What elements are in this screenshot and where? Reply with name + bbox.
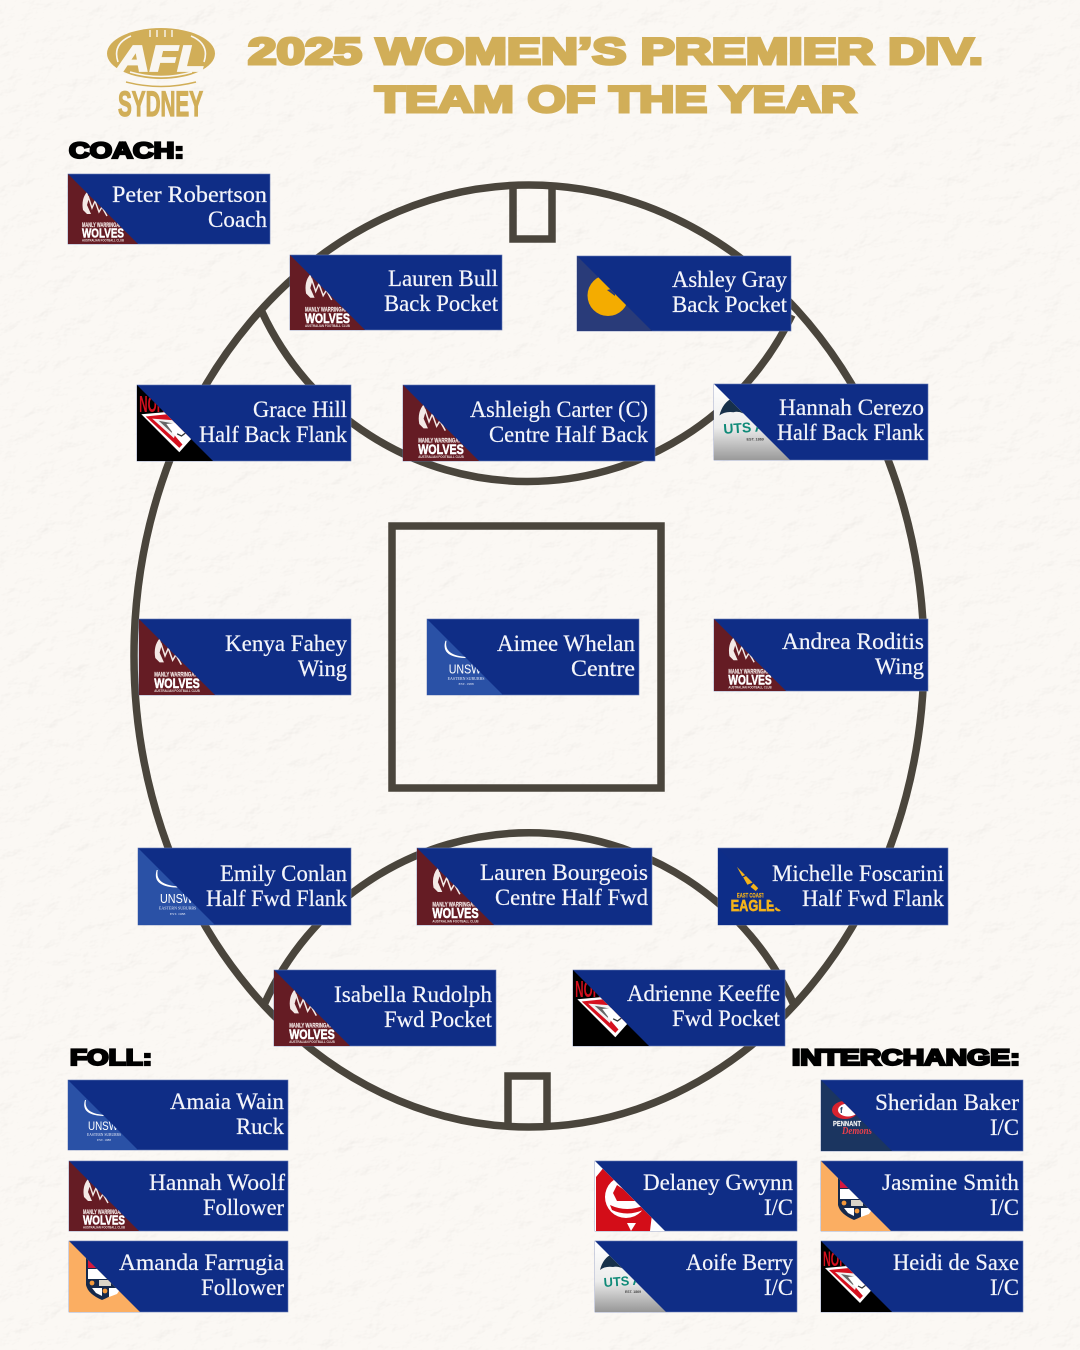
card: Delaney Gwynn: Delaney Gwynn	[643, 1170, 793, 1195]
card: Peter Robertson	[68, 174, 270, 244]
heading: coach: COACH:	[69, 138, 184, 163]
card: Michelle Foscarini: Half Fwd Flank	[802, 886, 944, 911]
heading: foll: FOLL:	[70, 1045, 152, 1070]
card: Aoife Berry	[595, 1241, 797, 1321]
card: Amanda Farrugia: Follower	[201, 1275, 284, 1300]
card: Grace Hill	[136, 384, 352, 462]
card: Hannah Cerezo: Half Back Flank	[777, 420, 924, 445]
card: Amanda Farrugia	[69, 1241, 288, 1321]
card: Emily Conlan: Half Fwd Flank	[206, 886, 347, 911]
card: Ashleigh Carter	[402, 384, 656, 462]
card: Sheridan Baker: I/C	[990, 1115, 1019, 1140]
card: Isabella Rudolph	[274, 970, 496, 1046]
card: Lauren Bull	[290, 254, 502, 330]
card: Lauren Bull: Lauren Bull	[388, 266, 498, 291]
title: TEAM OF THE YEAR	[375, 78, 856, 120]
card: Hannah Woolf: Hannah Woolf	[149, 1170, 285, 1195]
card: Jasmine Smith: I/C	[990, 1195, 1019, 1220]
card: Ashleigh Carter: Centre Half Back	[489, 422, 648, 447]
card: Jasmine Smith: Jasmine Smith	[882, 1170, 1020, 1195]
card: Aoife Berry: I/C	[764, 1275, 793, 1300]
card: Michelle Foscarini	[718, 848, 948, 932]
card: Heidi de Saxe: I/C	[990, 1275, 1019, 1300]
card: Isabella Rudolph: Isabella Rudolph	[334, 982, 493, 1007]
card: Aimee Whelan: Centre	[571, 656, 635, 681]
card: Jasmine Smith	[820, 1160, 1024, 1232]
card: Lauren Bull: Back Pocket	[384, 291, 499, 316]
card: Heidi de Saxe: Heidi de Saxe	[893, 1250, 1019, 1275]
card: Hannah Woolf	[68, 1160, 288, 1232]
card: Emily Conlan: Emily Conlan	[220, 861, 347, 886]
card: Peter Robertson: Peter Robertson	[112, 182, 268, 207]
card: Amaia Wain: Amaia Wain	[170, 1089, 284, 1114]
card: Aimee Whelan: Aimee Whelan	[497, 631, 635, 656]
card: Amaia Wain	[68, 1080, 288, 1150]
card: Kenya Fahey: Wing	[298, 656, 347, 681]
card: Amanda Farrugia: Amanda Farrugia	[119, 1250, 284, 1275]
heading: interchange: INTERCHANGE:	[792, 1045, 1020, 1070]
card: Aoife Berry: Aoife Berry	[686, 1250, 793, 1275]
card: Hannah Cerezo	[714, 384, 928, 460]
card: Aimee Whelan	[426, 618, 640, 696]
card: Ashley Gray	[577, 256, 791, 336]
card: Kenya Fahey: Kenya Fahey	[225, 631, 347, 656]
logo: AFL Sydney: SYDNEY	[118, 85, 203, 124]
card: Lauren Bourgeois: Centre Half Fwd	[495, 885, 648, 910]
card: Hannah Woolf: Follower	[203, 1195, 284, 1220]
AFL field markings	[134, 185, 924, 1127]
card: Sheridan Baker: Sheridan Baker	[875, 1090, 1019, 1115]
card: Grace Hill: Grace Hill	[253, 397, 347, 422]
card: Heidi de Saxe	[821, 1241, 1023, 1321]
card: Andrea Roditis	[714, 618, 928, 692]
logo: AFL Sydney	[107, 28, 215, 124]
card: Kenya Fahey	[138, 618, 352, 696]
card: Michelle Foscarini: Michelle Foscarini	[772, 861, 944, 886]
card: Lauren Bourgeois: Lauren Bourgeois	[480, 860, 648, 885]
card: Adrienne Keeffe: Adrienne Keeffe	[627, 981, 780, 1006]
card: Delaney Gwynn: I/C	[764, 1195, 793, 1220]
card: Amaia Wain: Ruck	[236, 1114, 284, 1139]
card: Ashleigh Carter: Ashleigh Carter (C)	[470, 397, 648, 422]
card: Delaney Gwynn	[594, 1160, 798, 1232]
card: Adrienne Keeffe: Fwd Pocket	[672, 1006, 781, 1031]
card: Sheridan Baker	[821, 1080, 1023, 1160]
title	[248, 30, 983, 120]
card: Peter Robertson: Coach	[208, 207, 267, 232]
card: Ashley Gray: Back Pocket	[672, 292, 788, 317]
card: Andrea Roditis: Wing	[875, 654, 924, 679]
card: Adrienne Keeffe	[572, 970, 786, 1046]
logo: AFL Sydney: AFL	[116, 38, 205, 79]
card: Andrea Roditis: Andrea Roditis	[782, 629, 924, 654]
title: 2025 WOMEN’S PREMIER DIV.	[248, 30, 983, 72]
card: Hannah Cerezo: Hannah Cerezo	[779, 395, 924, 420]
card: Emily Conlan	[138, 848, 352, 926]
card: Grace Hill: Half Back Flank	[199, 422, 347, 447]
card: Isabella Rudolph: Fwd Pocket	[384, 1007, 493, 1032]
card: Lauren Bourgeois	[416, 848, 652, 926]
card: Ashley Gray: Ashley Gray	[672, 267, 787, 292]
